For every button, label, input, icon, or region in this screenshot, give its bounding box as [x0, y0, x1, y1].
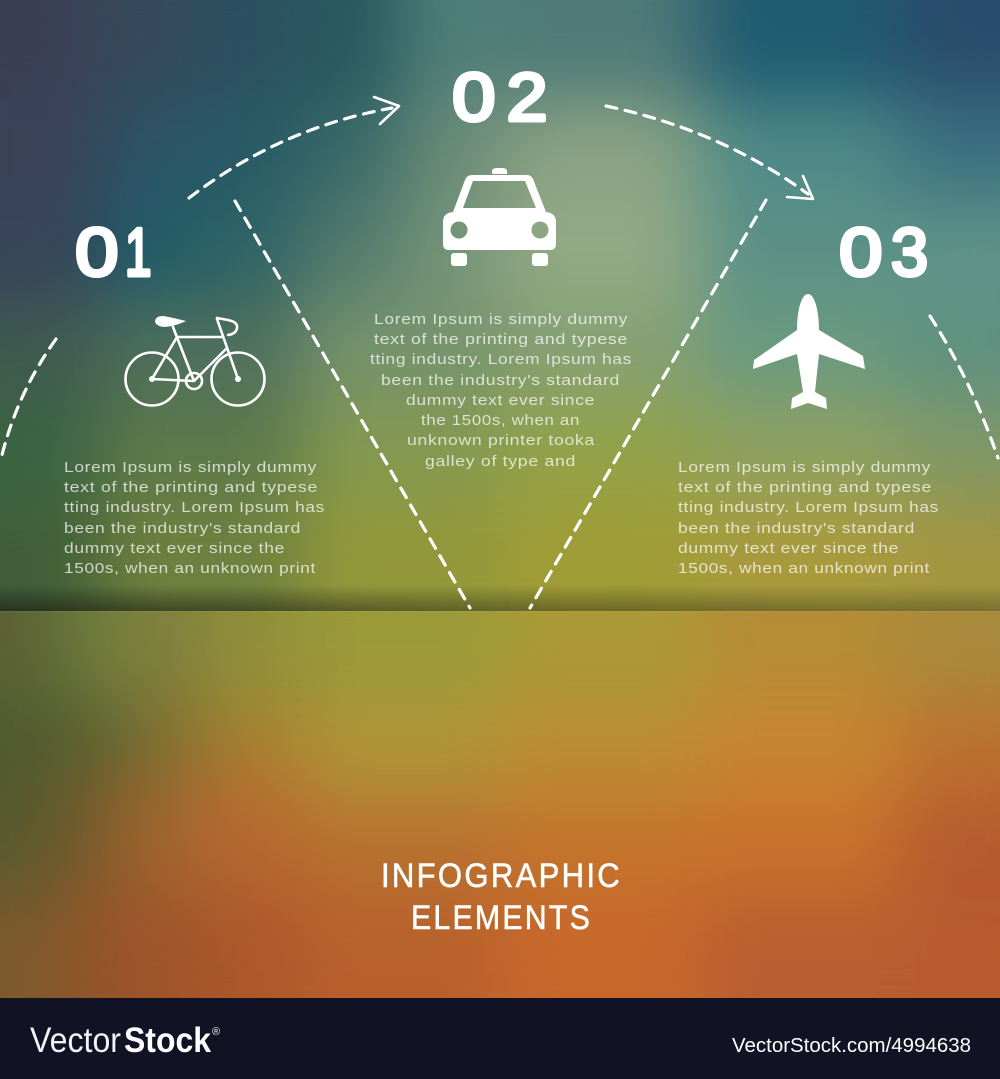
text block: column 2: been the industry's standard — [381, 372, 620, 389]
text block: column 2: Lorem Ipsum is simply dummy — [374, 311, 628, 328]
number 03: 3 — [891, 215, 928, 291]
text block: column 2: tting industry. Lorem Ipsum has — [370, 351, 632, 368]
arrow: left partial arc — [2, 339, 56, 455]
number 02 — [452, 59, 547, 135]
footer image id: VectorStock.com/4994638 — [732, 1035, 971, 1057]
text block: column 1: text of the printing and typese — [64, 479, 318, 496]
number 01: 0 — [75, 215, 118, 290]
arrow: arc from 02 to 03 — [606, 106, 813, 199]
footer logo: ® — [212, 1026, 220, 1038]
text block: column 1: been the industry's standard — [64, 520, 301, 537]
text block: column 1 — [64, 459, 325, 577]
divider: left dashed line — [235, 201, 470, 608]
number 02: 2 — [507, 59, 547, 135]
text block: column 3: Lorem Ipsum is simply dummy — [678, 459, 931, 476]
divider: right dashed line — [530, 200, 766, 608]
text block: column 2: text of the printing and typese — [374, 331, 628, 348]
number 03 — [839, 215, 928, 291]
footer logo: Vector — [30, 1021, 121, 1060]
number 01 — [75, 215, 151, 291]
text block: column 1: tting industry. Lorem Ipsum has — [64, 499, 325, 516]
number 01: 1 — [125, 215, 151, 291]
panel: footer bar — [0, 998, 1000, 1079]
text block: column 3: text of the printing and typese — [678, 479, 932, 496]
text block: column 3: 1500s, when an unknown print — [678, 560, 930, 577]
icon: taxi — [443, 168, 556, 266]
text block: column 2: galley of type and — [425, 453, 576, 470]
icon: airplane — [753, 294, 865, 409]
text block: column 3: dummy text ever since the — [678, 540, 899, 557]
text block: column 3 — [678, 459, 939, 577]
text block: column 1: dummy text ever since the — [64, 540, 285, 557]
text block: column 2: the 1500s, when an — [421, 412, 580, 429]
footer logo — [30, 1021, 220, 1060]
text block: column 3: tting industry. Lorem Ipsum has — [678, 499, 939, 516]
footer logo: Stock — [124, 1021, 211, 1060]
panel: upper blurred background — [0, 0, 1000, 611]
text block: column 2 — [370, 311, 632, 470]
title: ELEMENTS — [411, 899, 592, 937]
title — [381, 857, 622, 937]
text block: column 2: unknown printer tooka — [407, 432, 595, 449]
text block: column 1: 1500s, when an unknown print — [64, 560, 316, 577]
panel: lower blurred background — [0, 611, 1000, 998]
text block: column 3: been the industry's standard — [678, 520, 915, 537]
icon: bicycle — [126, 316, 264, 406]
number 03: 0 — [839, 215, 882, 290]
text block: column 1: Lorem Ipsum is simply dummy — [64, 459, 317, 476]
number 02: 0 — [452, 60, 495, 135]
arrow: arc from 01 to 02 — [189, 97, 399, 198]
title: INFOGRAPHIC — [381, 857, 622, 895]
text block: column 2: dummy text ever since — [406, 392, 595, 409]
arrow: right partial arc — [930, 316, 998, 458]
